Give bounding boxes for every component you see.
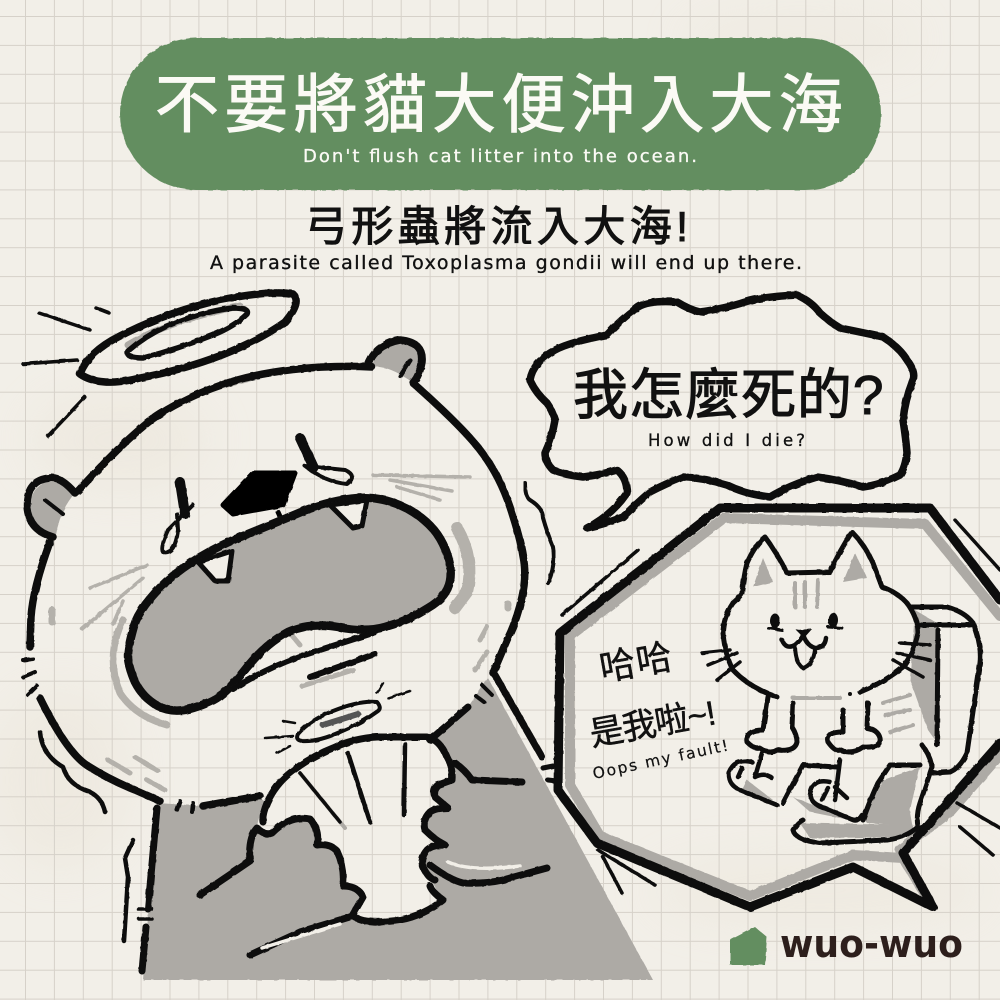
head outline [23, 340, 525, 812]
panel motion lines [562, 520, 1000, 893]
mouth [128, 498, 451, 711]
otter arms and paws [124, 675, 557, 971]
nose [223, 473, 295, 523]
bubble outline [530, 295, 914, 528]
cat speech: english: Oops my fault! [591, 737, 730, 783]
english subtitle: Don't flush cat litter into the ocean. [303, 146, 697, 167]
panel shadow [570, 518, 1000, 896]
bubble english text: How did I die? [648, 431, 805, 450]
head shadows [52, 380, 508, 790]
bubble chinese text: 我怎麼死的? [573, 364, 883, 426]
speech panel: cat on toilet [558, 508, 1000, 907]
wavy shake line [525, 483, 554, 583]
logo house icon [730, 927, 767, 965]
cat eyes and nose [770, 612, 852, 696]
small halo [265, 683, 410, 753]
cat linework [702, 532, 980, 843]
illustration: otter ghost [23, 293, 653, 980]
teeth [198, 500, 367, 581]
title banner [120, 38, 881, 190]
banner pill [120, 38, 881, 190]
subheading: 弓形蟲將流入大海! [305, 203, 692, 250]
lower lip [233, 633, 375, 689]
cat gray markings [742, 553, 940, 838]
main title: 不要將貓大便沖入大海 [155, 69, 848, 141]
otter body [143, 678, 653, 980]
cat speech: haha: 哈哈 [596, 636, 676, 689]
shell [263, 737, 452, 828]
eyes and tears [162, 438, 352, 552]
logo wordmark: wuo-wuo [780, 922, 963, 966]
paw highlights [262, 862, 520, 948]
cat speech: it was me: 是我啦~! [587, 695, 718, 754]
panel outline [558, 508, 1000, 907]
ears [28, 342, 420, 537]
logo [730, 922, 963, 966]
speech bubble: how did I die [525, 295, 914, 583]
english subheading: A parasite called Toxoplasma gondii will end up there. [210, 252, 802, 274]
halo [23, 293, 296, 436]
